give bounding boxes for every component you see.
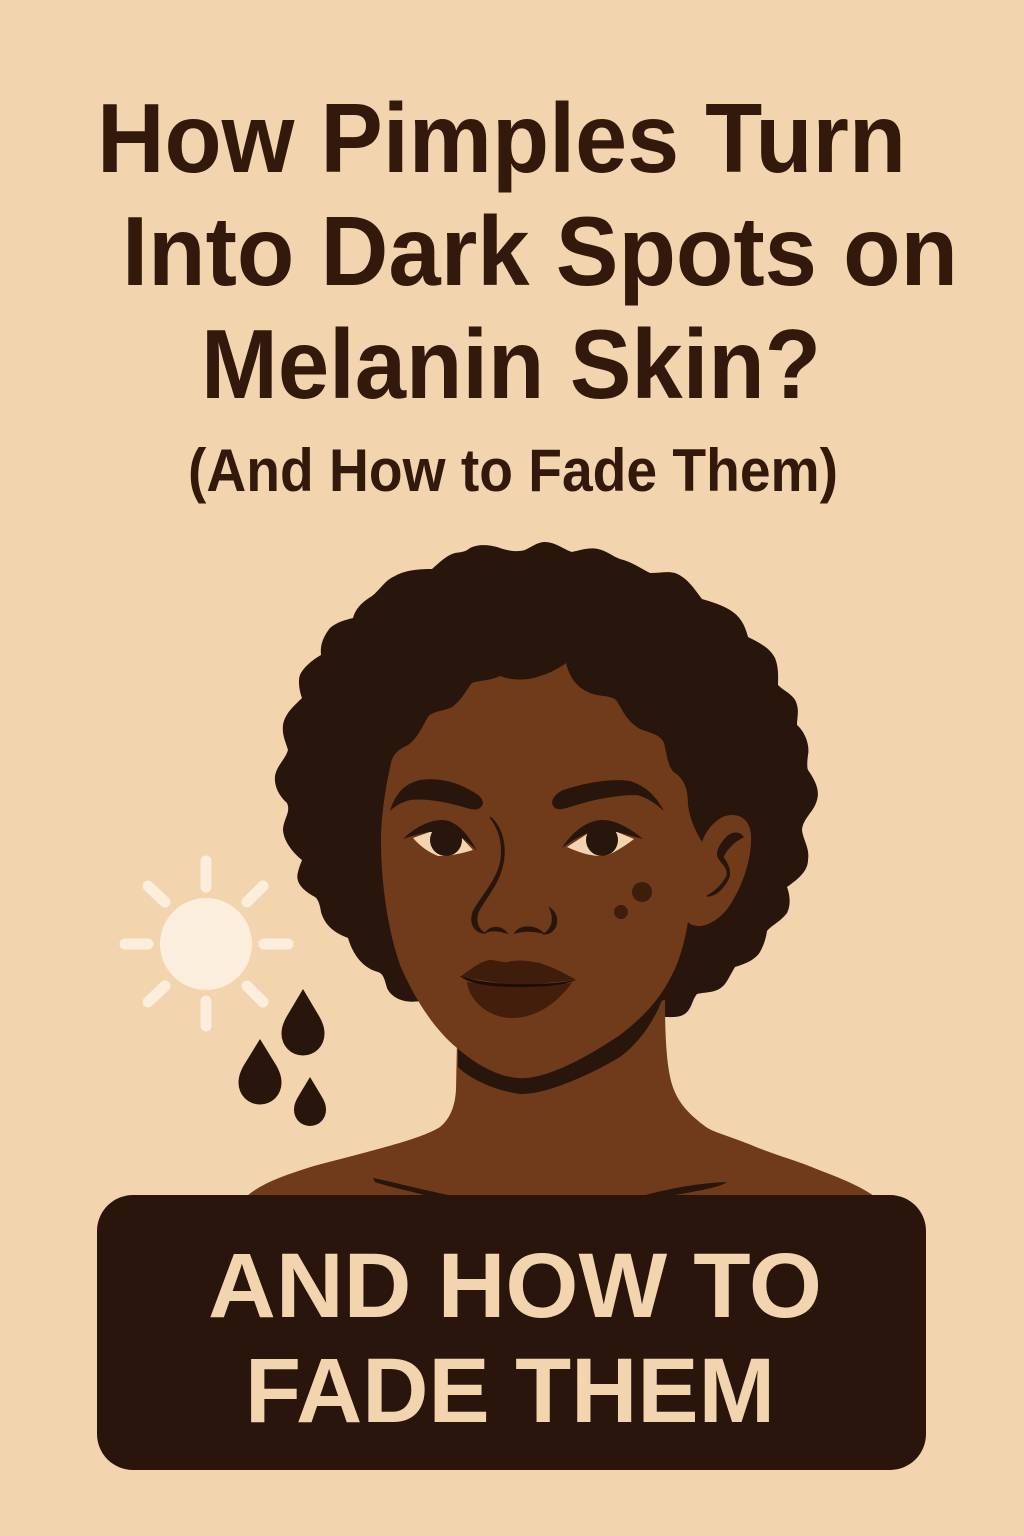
nose bbox=[472, 817, 557, 934]
right eye bbox=[562, 820, 643, 856]
banner text: AND HOW TO bbox=[208, 1235, 822, 1337]
title: How Pimples Turn bbox=[97, 83, 906, 193]
face and ear bbox=[381, 663, 751, 1078]
right eyebrow bbox=[552, 780, 664, 811]
title: Into Dark Spots on bbox=[122, 196, 958, 306]
banner bbox=[97, 1195, 926, 1470]
inner ear bbox=[707, 833, 743, 896]
banner text: FADE THEM bbox=[245, 1340, 775, 1442]
left eyebrow bbox=[390, 779, 483, 811]
collarbone lines bbox=[373, 1178, 727, 1196]
subtitle: (And How to Fade Them) bbox=[188, 437, 838, 504]
title: Melanin Skin? bbox=[201, 309, 821, 419]
title bbox=[97, 83, 958, 419]
left eye bbox=[403, 820, 477, 856]
icon: sun bbox=[125, 861, 288, 1026]
banner text bbox=[208, 1235, 822, 1442]
hair bbox=[275, 542, 818, 1017]
lips bbox=[460, 960, 576, 1018]
icon: water drops bbox=[238, 989, 326, 1126]
neck and shoulders bbox=[247, 1000, 874, 1196]
jaw shadow bbox=[458, 995, 664, 1094]
portrait illustration bbox=[247, 542, 874, 1196]
dark spots bbox=[614, 882, 652, 919]
